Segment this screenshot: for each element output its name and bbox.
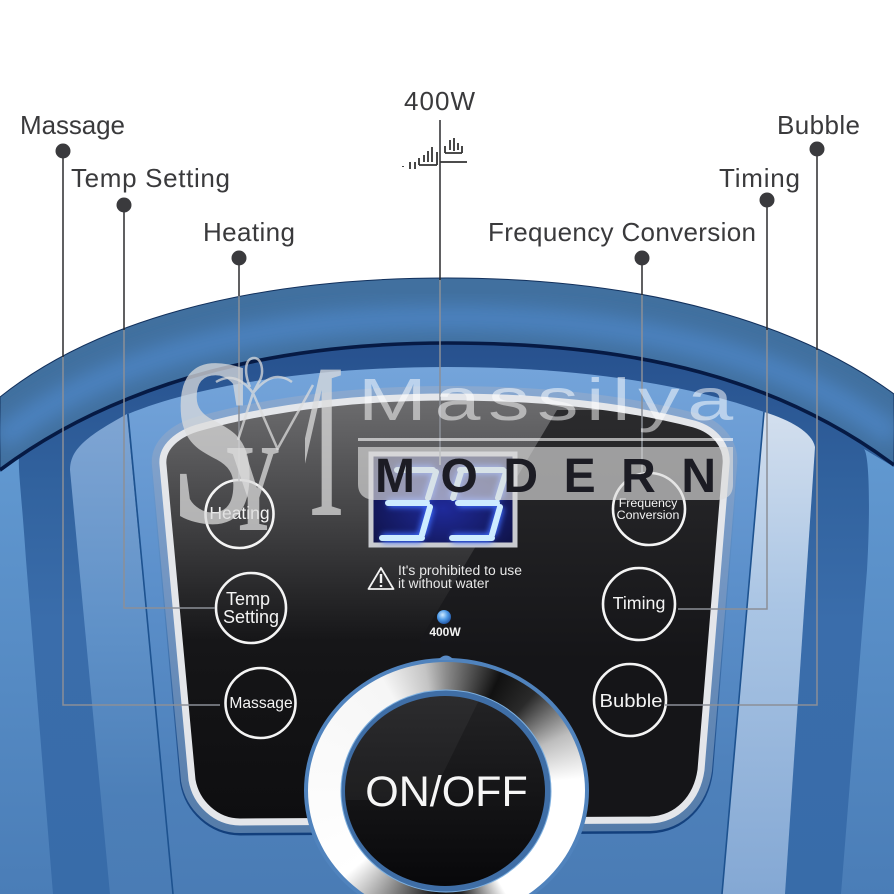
dark line segments above the device	[63, 120, 817, 357]
control panel	[163, 397, 740, 830]
dome rim	[0, 278, 894, 894]
button: Temp Setting: Setting	[223, 607, 279, 627]
grey line segments over the device	[63, 280, 817, 705]
button: Massage: Massage	[229, 695, 293, 712]
panel face	[163, 397, 726, 822]
callout dots	[56, 142, 824, 266]
monogram letters	[180, 363, 341, 530]
device body	[0, 278, 894, 894]
watermark logo	[180, 356, 734, 530]
button: Bubble: Bubble	[600, 690, 662, 711]
icon: warning triangle	[368, 568, 394, 589]
warning text line 1: It's prohibited to use	[398, 563, 522, 578]
centre panel	[128, 367, 764, 894]
button: Heating: Heating	[209, 503, 270, 523]
panel reflection	[440, 410, 722, 609]
dial nub	[438, 656, 454, 660]
watermark band text: MODERN	[375, 450, 716, 503]
dark seam	[0, 343, 894, 470]
button: Frequency Conversion: Conversion	[617, 508, 679, 522]
far right panel	[841, 449, 894, 894]
leader lines	[63, 120, 817, 705]
icon: blue LED	[437, 610, 451, 624]
warning text line 2: it without water	[398, 576, 490, 591]
digit 3 and 9 segments	[382, 470, 506, 538]
far left panel	[0, 458, 53, 894]
digit glow	[382, 470, 506, 538]
right light strip	[722, 412, 815, 894]
label: 400W: 400W	[404, 86, 475, 116]
button: Massage	[226, 668, 296, 738]
label: Massage: Massage	[20, 110, 125, 140]
dial face	[345, 696, 545, 886]
watermark rule	[358, 438, 733, 441]
monogram letters: S	[172, 308, 256, 574]
label: Timing: Timing	[719, 163, 800, 193]
centre panel edges	[128, 412, 764, 894]
dial blue rim	[341, 690, 551, 892]
button: Timing	[603, 568, 675, 640]
label: Temp Setting: Temp Setting	[71, 163, 230, 193]
watermark band	[358, 447, 733, 500]
button: Bubble	[594, 664, 666, 736]
button: Frequency Conversion: Frequency	[619, 496, 678, 510]
label: Heating: Heating	[203, 217, 295, 247]
watermark wordmark: Massilya	[358, 367, 733, 433]
ON/OFF label: ON/OFF	[365, 768, 528, 816]
panel border	[163, 397, 726, 822]
warning notice	[368, 563, 522, 591]
button: Heating	[206, 480, 274, 548]
power indicator	[429, 610, 461, 639]
button: Timing: Timing	[613, 593, 665, 613]
label: Frequency Conversion: Frequency Conversion	[488, 217, 756, 247]
dial reflection	[345, 696, 478, 800]
button: Temp Setting: Temp	[226, 589, 270, 609]
panel bevel	[163, 398, 726, 824]
monogram thin stroke and scissor flourish	[216, 358, 313, 450]
button: Frequency Conversion	[613, 473, 685, 545]
monogram letters: Y	[226, 420, 280, 558]
dome highlight	[0, 318, 894, 440]
power label: 400W	[429, 625, 461, 639]
watermark logo: M	[248, 318, 344, 564]
display frame	[371, 454, 515, 545]
button: Temp Setting	[216, 573, 286, 643]
left light strip	[70, 414, 173, 894]
power dial	[340, 656, 551, 892]
temperature display	[371, 454, 515, 545]
icon: 400W power bars	[403, 138, 467, 169]
lower body base	[0, 343, 894, 894]
label: Bubble: Bubble	[777, 110, 860, 140]
power dial chrome ring	[304, 658, 589, 894]
